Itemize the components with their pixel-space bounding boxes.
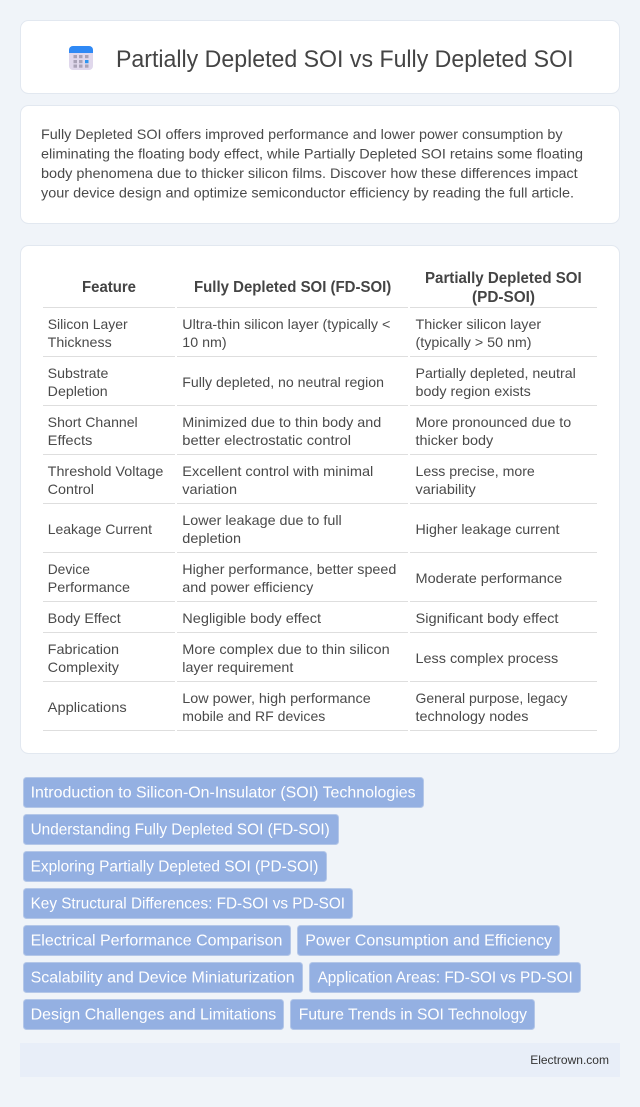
table row: fabrication complexity: Complexity xyxy=(48,659,119,675)
table row: threshold voltage control: Less precise, more xyxy=(416,463,535,479)
table row: fabrication complexity xyxy=(43,641,597,682)
table row: applications: General purpose, legacy xyxy=(416,690,568,706)
table row: body effect xyxy=(43,610,597,633)
table row: silicon layer thickness: Thickness xyxy=(48,334,112,350)
chip: electrical performance xyxy=(24,926,290,956)
text block: summary: Fully Depleted SOI offers improved performance and lower power consumption by xyxy=(41,126,563,142)
chip: application areas xyxy=(310,962,580,992)
table row: body effect: Negligible body effect xyxy=(182,610,321,626)
table row: leakage current: Lower leakage due to full xyxy=(182,512,342,528)
table row: threshold voltage control: Threshold Voltage xyxy=(48,463,164,479)
chip: scalability: Scalability and Device Miniaturization xyxy=(31,970,295,986)
icon: calendar xyxy=(69,46,93,70)
table row: short channel effects xyxy=(43,414,597,455)
footer xyxy=(20,1043,620,1077)
table row: silicon layer thickness: Silicon Layer xyxy=(48,316,128,332)
chip: understanding FD-SOI xyxy=(24,814,338,844)
chip: future trends: Future Trends in SOI Technology xyxy=(299,1006,527,1024)
chip: exploring PD-SOI: Exploring Partially Depleted SOI (PD-SOI) xyxy=(31,858,318,876)
chip: application areas: Application Areas: FD-SOI vs PD-SOI xyxy=(318,970,573,986)
table row: applications: Low power, high performance xyxy=(182,690,371,706)
table row: body effect: Significant body effect xyxy=(416,610,559,626)
chip: understanding FD-SOI: Understanding Fully Depleted SOI (FD-SOI) xyxy=(31,822,330,838)
table row: device performance: Performance xyxy=(48,579,130,595)
table row: body effect: Body Effect xyxy=(48,610,121,626)
table row: leakage current: Higher leakage current xyxy=(416,521,560,537)
chip: introduction: Introduction to Silicon-On-Insulator (SOI) Technologies xyxy=(31,784,416,802)
table row: substrate depletion: Depletion xyxy=(48,383,108,399)
text block: summary: eliminating the floating body effect, while Partially Depleted SOI retains some floating xyxy=(41,146,583,162)
table header row: Fully Depleted SOI (FD-SOI) xyxy=(194,279,391,296)
table row: silicon layer thickness xyxy=(43,316,597,357)
table row: device performance xyxy=(43,561,597,602)
chip: design challenges: Design Challenges and Limitations xyxy=(31,1006,276,1024)
table row: applications xyxy=(43,690,597,731)
table row: threshold voltage control: Excellent control with minimal xyxy=(182,463,373,479)
table row: short channel effects: More pronounced due to xyxy=(416,414,571,430)
table row: substrate depletion: Partially depleted, neutral xyxy=(416,365,576,381)
title: Partially Depleted SOI vs Fully Depleted SOI xyxy=(116,46,574,73)
table row: short channel effects: Minimized due to thin body and xyxy=(182,414,381,430)
panel: header xyxy=(20,20,620,94)
chip: power consumption: Power Consumption and Efficiency xyxy=(305,932,552,950)
table row: leakage current: depletion xyxy=(182,530,241,546)
chip: scalability xyxy=(24,962,302,992)
table row: fabrication complexity: Fabrication xyxy=(48,641,119,657)
table row: short channel effects: Effects xyxy=(48,432,92,448)
panel: comparison table xyxy=(20,246,620,754)
table row: substrate depletion: Substrate xyxy=(48,365,109,381)
chip: structural differences xyxy=(24,888,352,918)
table row: silicon layer thickness: Thicker silicon layer xyxy=(416,316,542,332)
text block: summary xyxy=(41,126,583,200)
table header row: (PD-SOI) xyxy=(472,289,535,306)
table header row: Feature xyxy=(82,279,136,296)
table row: device performance: and power efficiency xyxy=(182,579,313,595)
table row: silicon layer thickness: (typically > 50 nm) xyxy=(416,334,532,350)
chip: introduction xyxy=(24,778,424,808)
table row: device performance: Device xyxy=(48,561,90,577)
table header row: Partially Depleted SOI xyxy=(425,270,582,287)
table row: threshold voltage control xyxy=(43,463,597,504)
table header row xyxy=(43,270,597,308)
table row: applications: Applications xyxy=(48,699,127,715)
text block: summary: body phenomena due to thicker silicon films. Discover how these differences impact xyxy=(41,165,578,181)
table row: leakage current xyxy=(43,512,597,553)
table row: substrate depletion: body region exists xyxy=(416,383,531,399)
chip: exploring PD-SOI xyxy=(24,852,326,882)
table row: silicon layer thickness: Ultra-thin silicon layer (typically < xyxy=(182,316,390,332)
table row: substrate depletion: Fully depleted, no neutral region xyxy=(182,374,384,390)
table row: applications: technology nodes xyxy=(416,708,528,724)
table row: device performance: Higher performance, better speed xyxy=(182,561,396,577)
table row: fabrication complexity: Less complex process xyxy=(416,650,558,666)
table row: short channel effects: better electrostatic control xyxy=(182,432,351,448)
chip: structural differences: Key Structural Differences: FD-SOI vs PD-SOI xyxy=(31,896,345,912)
table row: silicon layer thickness: 10 nm) xyxy=(182,334,227,350)
table row: fabrication complexity: layer requirement xyxy=(182,659,293,675)
chip: electrical performance: Electrical Performance Comparison xyxy=(31,932,282,950)
panel: topic links xyxy=(24,778,580,1030)
chip: future trends xyxy=(290,1000,534,1030)
table row: threshold voltage control: variation xyxy=(182,481,237,497)
table row: device performance: Moderate performance xyxy=(416,570,562,586)
table row: threshold voltage control: variability xyxy=(416,481,476,497)
text block: summary: your device design and optimize semiconductor efficiency by reading the full article. xyxy=(41,184,574,200)
chip: design challenges xyxy=(24,1000,284,1030)
table row: fabrication complexity: More complex due to thin silicon xyxy=(182,641,390,657)
footer: Electrown.com xyxy=(530,1053,609,1067)
table row: substrate depletion xyxy=(43,365,597,406)
table row: short channel effects: Short Channel xyxy=(48,414,138,430)
table row: short channel effects: thicker body xyxy=(416,432,493,448)
panel: introduction xyxy=(20,106,620,224)
chip: power consumption xyxy=(298,926,560,956)
table row: applications: mobile and RF devices xyxy=(182,708,325,724)
table row: threshold voltage control: Control xyxy=(48,481,94,497)
table row: leakage current: Leakage Current xyxy=(48,521,152,537)
